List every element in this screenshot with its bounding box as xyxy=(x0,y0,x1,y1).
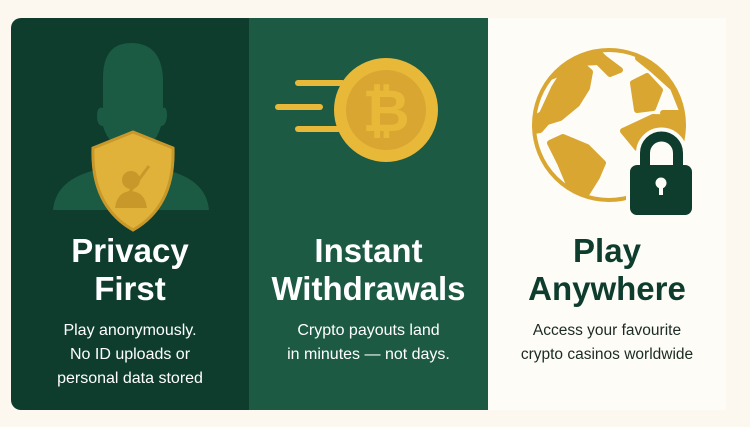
heading xyxy=(71,232,189,307)
heading: Withdrawals xyxy=(271,270,466,307)
text xyxy=(521,322,693,363)
text: No ID uploads or xyxy=(70,346,190,363)
text: Access your favourite xyxy=(533,322,681,339)
heading: Privacy xyxy=(71,232,189,269)
panel: privacy xyxy=(11,18,249,410)
text: Crypto payouts land xyxy=(297,322,440,339)
heading: Anywhere xyxy=(528,270,686,307)
heading xyxy=(271,232,466,307)
icon: globe with lock xyxy=(532,48,692,215)
icon: bitcoin coin xyxy=(275,58,438,162)
text: in minutes — not days. xyxy=(287,346,450,363)
heading: Instant xyxy=(314,232,423,269)
icon: bitcoin coin: ₿ xyxy=(362,79,410,144)
icon: person with shield xyxy=(53,43,209,232)
text: crypto casinos worldwide xyxy=(521,346,693,363)
text xyxy=(57,322,203,387)
panel: anywhere xyxy=(522,48,692,362)
text: personal data stored xyxy=(57,370,203,387)
heading xyxy=(528,232,686,307)
heading: First xyxy=(94,270,166,307)
text xyxy=(287,322,450,363)
panel: withdrawals xyxy=(249,18,488,410)
text: Play anonymously. xyxy=(63,322,197,339)
heading: Play xyxy=(573,232,641,269)
